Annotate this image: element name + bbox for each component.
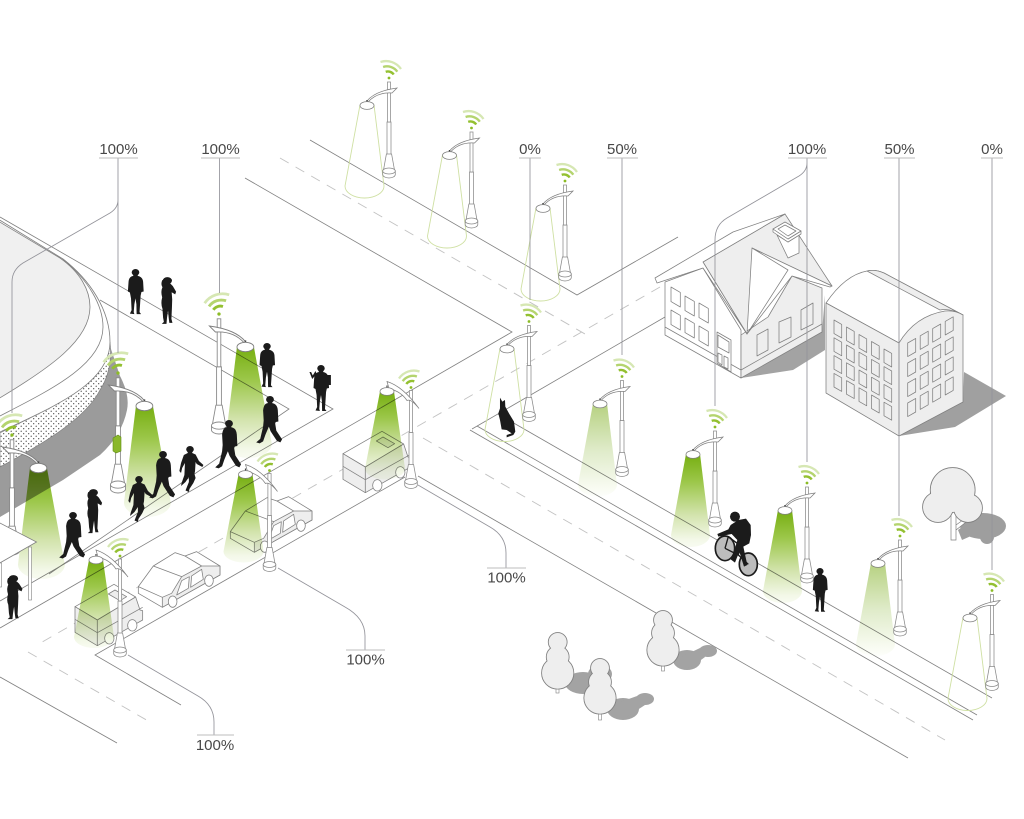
lamp: pedestrian street by building, 100%	[0, 415, 65, 579]
label: 50% east road second: 50%	[884, 141, 915, 158]
shadow: house	[741, 295, 825, 378]
label: 100% lower roadside lamp: 100%	[196, 737, 234, 754]
vehicle: parked car, upper	[230, 497, 312, 552]
lamp: upper road 1, 0%	[345, 61, 401, 198]
building: apartment block	[826, 270, 963, 436]
icon: green control box on lamp	[113, 435, 121, 453]
lamp: east road, 50% second	[856, 519, 912, 656]
lamp: east road, 100% second	[763, 466, 819, 603]
callout lines to lamps	[12, 158, 992, 735]
label: 0% east road end: 0%	[981, 141, 1003, 158]
shadow: apartment block	[899, 372, 1006, 436]
vehicle: van at centre junction	[343, 431, 411, 493]
vehicle: van at lower left	[75, 584, 143, 646]
lamp: east road, 50%	[578, 360, 634, 496]
canopy: bus shelter	[0, 522, 36, 600]
label: 100% pedestrian lamp: 100%	[201, 141, 240, 158]
lamp: pedestrian street, 100%	[205, 294, 272, 458]
cyclist	[715, 512, 757, 576]
label: 100% junction lamp: 100%	[487, 570, 526, 586]
label: 100% roadside lamp: 100%	[346, 652, 385, 668]
vehicle: parked car, centre	[138, 552, 220, 607]
animal: cat	[498, 398, 515, 437]
road network lines	[0, 140, 992, 758]
tree: small tree C	[647, 611, 717, 671]
label: 50% east road first: 50%	[607, 141, 637, 158]
label: 100% east road: 100%	[788, 141, 826, 158]
lamp: junction, 100%	[365, 371, 420, 488]
lamp: roadside, 100%	[224, 454, 278, 572]
lamp: roadside lower, 100%	[74, 539, 128, 657]
tree: small tree B	[584, 659, 654, 720]
lamp: pedestrian street with battery box, 100%	[104, 353, 171, 517]
lamp: east road, 100%	[671, 410, 727, 547]
lamp: upper road 3, 0%	[521, 164, 577, 301]
label: 0% upper road: 0%	[519, 141, 541, 158]
tree: small tree A	[542, 633, 612, 694]
building: round stadium at left	[0, 219, 111, 467]
lamp: cat lamp, 0%	[485, 305, 541, 442]
tree: large tree with shadow	[923, 468, 1006, 544]
pedestrians	[7, 269, 828, 619]
lamp: east road, 0%	[948, 574, 1004, 710]
shadow: round building	[0, 340, 128, 517]
lamp: upper road 2, 0%	[428, 111, 484, 248]
building: house	[655, 214, 832, 378]
label: 100% lamp group far left: 100%	[99, 141, 138, 158]
